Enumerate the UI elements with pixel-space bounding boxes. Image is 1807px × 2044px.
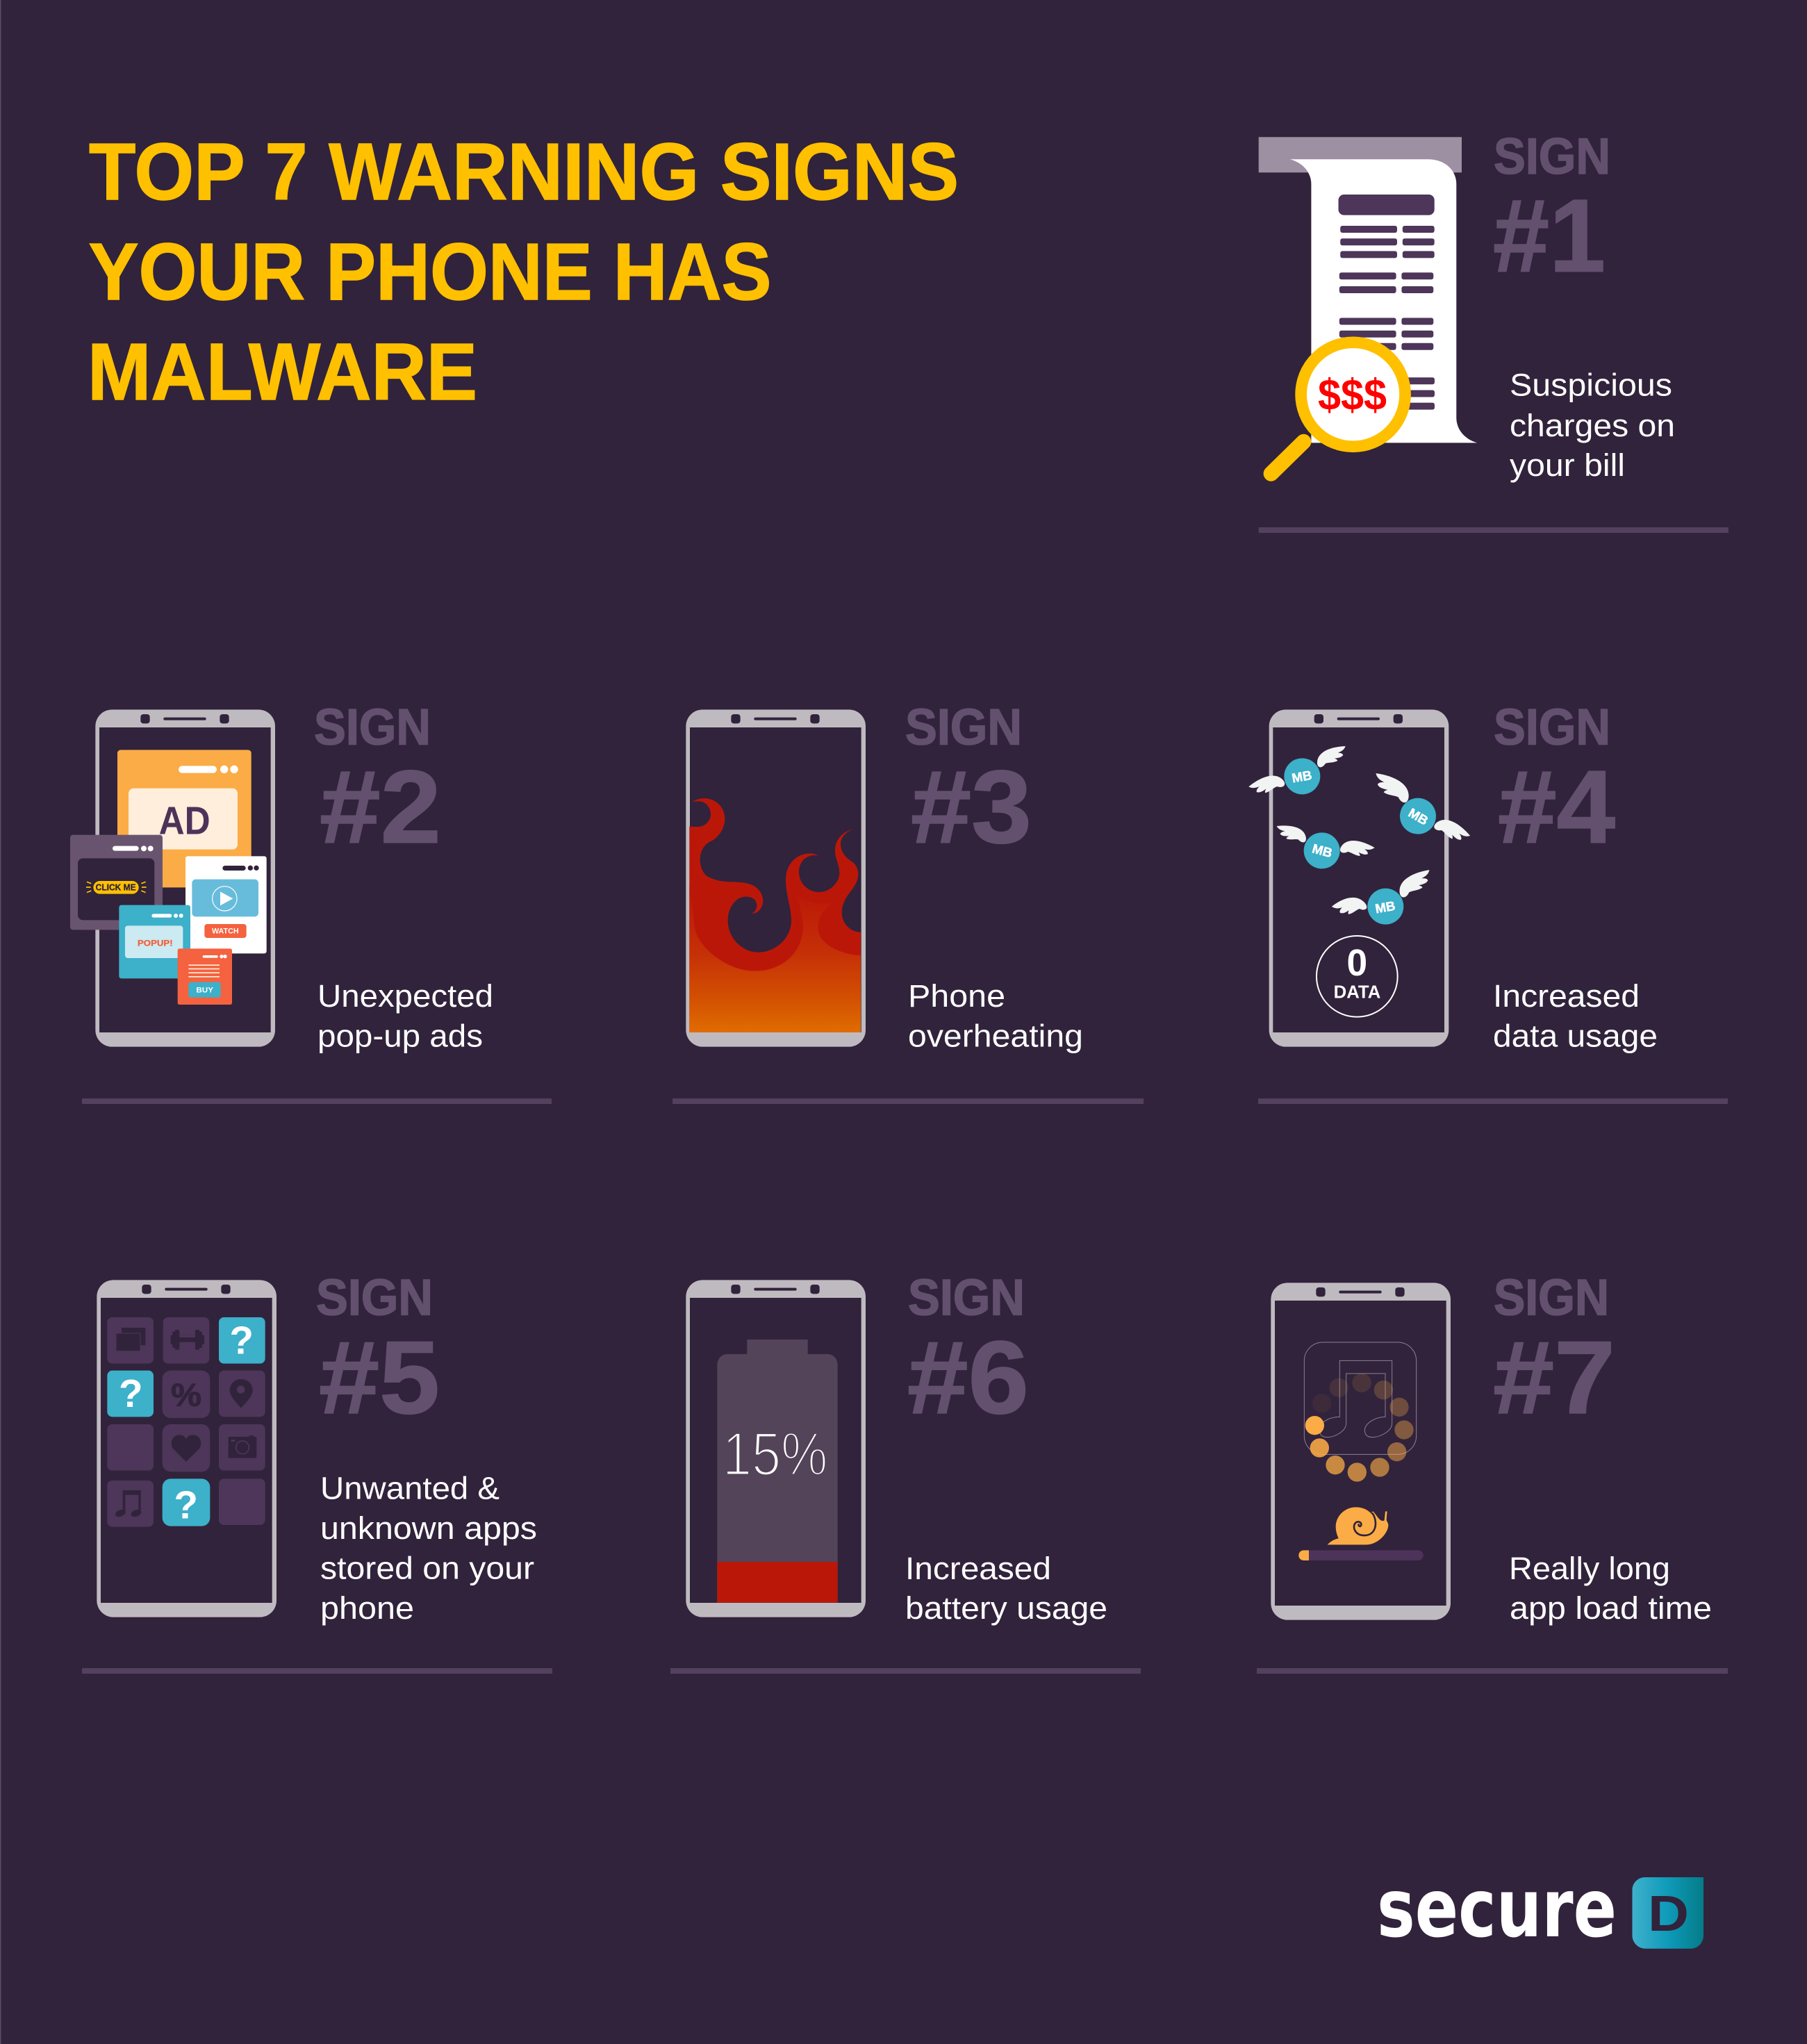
text: sign 5 description — [320, 1470, 537, 1626]
buy window: BUY — [196, 987, 213, 995]
panel: sign 3 phone with flames — [686, 709, 866, 1047]
text: sign 7 description — [1509, 1551, 1712, 1626]
icon: receipt with magnifying glass: $$$ — [1318, 371, 1387, 420]
icon: windows — [116, 1328, 145, 1351]
click me window — [70, 835, 163, 930]
ad window: AD — [159, 800, 211, 843]
heading: sign 7: SIGN — [1494, 1270, 1609, 1326]
heading: sign 1: #1 — [1493, 178, 1606, 294]
text: sign 3 description: overheating — [908, 1019, 1083, 1054]
buy window — [178, 948, 232, 1005]
popup window: POPUP! — [138, 938, 173, 948]
heading: sign 2: #2 — [320, 749, 441, 865]
icon: map pin — [230, 1379, 253, 1408]
logo: secureD: secure — [1377, 1862, 1617, 1956]
popup window — [119, 905, 190, 978]
heading: sign 3: SIGN — [905, 700, 1022, 756]
music app outline — [1304, 1342, 1417, 1454]
text: sign 2 description: Unexpected — [317, 978, 493, 1014]
heading: sign 2 — [314, 700, 441, 865]
text: sign 1 description: charges on — [1510, 408, 1675, 443]
title: MALWARE — [88, 327, 477, 417]
flying MB 3: MB — [1311, 841, 1334, 860]
flying MB 2 — [1373, 773, 1470, 850]
loading spinner dots — [1305, 1374, 1414, 1482]
app tiles — [107, 1317, 265, 1527]
text: sign 7 description: app load time — [1510, 1590, 1712, 1626]
text: sign 1 description — [1510, 367, 1675, 483]
icon: camera — [229, 1435, 256, 1458]
heading: sign 1 — [1493, 129, 1610, 294]
unknown app tiles: ? — [119, 1372, 143, 1416]
text: sign 2 description — [317, 978, 493, 1054]
title: YOUR PHONE HAS — [89, 226, 771, 317]
flying MB 2: MB — [1406, 805, 1430, 828]
zero data badge — [1317, 936, 1398, 1017]
icon: dumbbell — [171, 1330, 204, 1350]
icon: music note — [115, 1490, 142, 1518]
battery: 15% — [723, 1419, 827, 1488]
text: sign 1 description: your bill — [1510, 447, 1625, 483]
text: sign 2 description: pop-up ads — [317, 1019, 483, 1054]
flying MB 1: MB — [1291, 768, 1313, 785]
unknown app tiles: ? — [174, 1484, 198, 1528]
text: sign 4 description: data usage — [1493, 1019, 1658, 1054]
text: sign 5 description: phone — [320, 1590, 414, 1626]
ad window — [117, 750, 251, 887]
icon: snail — [1328, 1507, 1388, 1544]
logo: secureD: D — [1648, 1886, 1689, 1942]
flying MB 1 — [1248, 746, 1346, 804]
text: sign 4 description: Increased — [1493, 978, 1640, 1014]
panel: sign 5 phone with unknown apps — [97, 1280, 277, 1617]
text: sign 7 description: Really long — [1509, 1551, 1670, 1586]
text: sign 5 description: stored on your — [320, 1551, 534, 1586]
heading: sign 3: #3 — [911, 749, 1032, 865]
title — [88, 126, 959, 417]
text: sign 5 description: Unwanted & — [320, 1470, 500, 1506]
heading: sign 4 — [1494, 700, 1615, 865]
text: sign 6 description — [905, 1551, 1107, 1626]
text: sign 3 description — [908, 978, 1083, 1054]
heading: sign 6 — [907, 1270, 1029, 1435]
battery — [717, 1340, 838, 1603]
heading: sign 4: #4 — [1498, 749, 1615, 865]
heading: sign 2: SIGN — [314, 700, 431, 756]
heading: sign 6: #6 — [907, 1319, 1029, 1435]
flying MB 4: MB — [1374, 898, 1396, 916]
text: sign 6 description: battery usage — [905, 1590, 1107, 1626]
progress bar — [1298, 1550, 1424, 1560]
text: sign 3 description: Phone — [908, 978, 1005, 1014]
flying MB 3 — [1277, 822, 1375, 868]
icon: percent: % — [171, 1376, 201, 1412]
icon: receipt with magnifying glass — [1259, 137, 1477, 474]
watch window: WATCH — [212, 927, 239, 935]
heading: sign 3 — [905, 700, 1032, 865]
zero data badge: 0 — [1346, 943, 1367, 984]
heading: sign 5: #5 — [319, 1319, 440, 1435]
text: sign 1 description: Suspicious — [1510, 367, 1672, 402]
unknown app tiles: ? — [229, 1319, 254, 1363]
click me window: CLICK ME — [96, 882, 136, 892]
title: TOP 7 WARNING SIGNS — [89, 126, 959, 217]
text: sign 4 description — [1493, 978, 1658, 1054]
flames — [689, 798, 861, 1032]
panel: sign 6 phone with low battery — [686, 1280, 866, 1617]
heading: sign 5: SIGN — [316, 1270, 433, 1326]
heading: sign 1: SIGN — [1494, 129, 1610, 185]
text: sign 6 description: Increased — [905, 1551, 1051, 1586]
panel: sign 2 phone with pop-up ads — [70, 709, 275, 1047]
heading: sign 7 — [1493, 1270, 1615, 1435]
heading: sign 7: #7 — [1493, 1319, 1615, 1435]
text: sign 5 description: unknown apps — [320, 1510, 537, 1546]
heading: sign 6: SIGN — [908, 1270, 1025, 1326]
heading: sign 4: SIGN — [1494, 700, 1610, 756]
heading: sign 5 — [316, 1270, 440, 1435]
watch window — [185, 856, 267, 953]
icon: heart — [172, 1435, 201, 1462]
panel: sign 4 phone with flying megabytes — [1248, 709, 1470, 1047]
unknown app tiles — [107, 1317, 265, 1528]
zero data badge: DATA — [1334, 983, 1380, 1003]
flying MB 4 — [1332, 870, 1433, 925]
panel: sign 7 phone with slow loading app — [1271, 1283, 1451, 1620]
